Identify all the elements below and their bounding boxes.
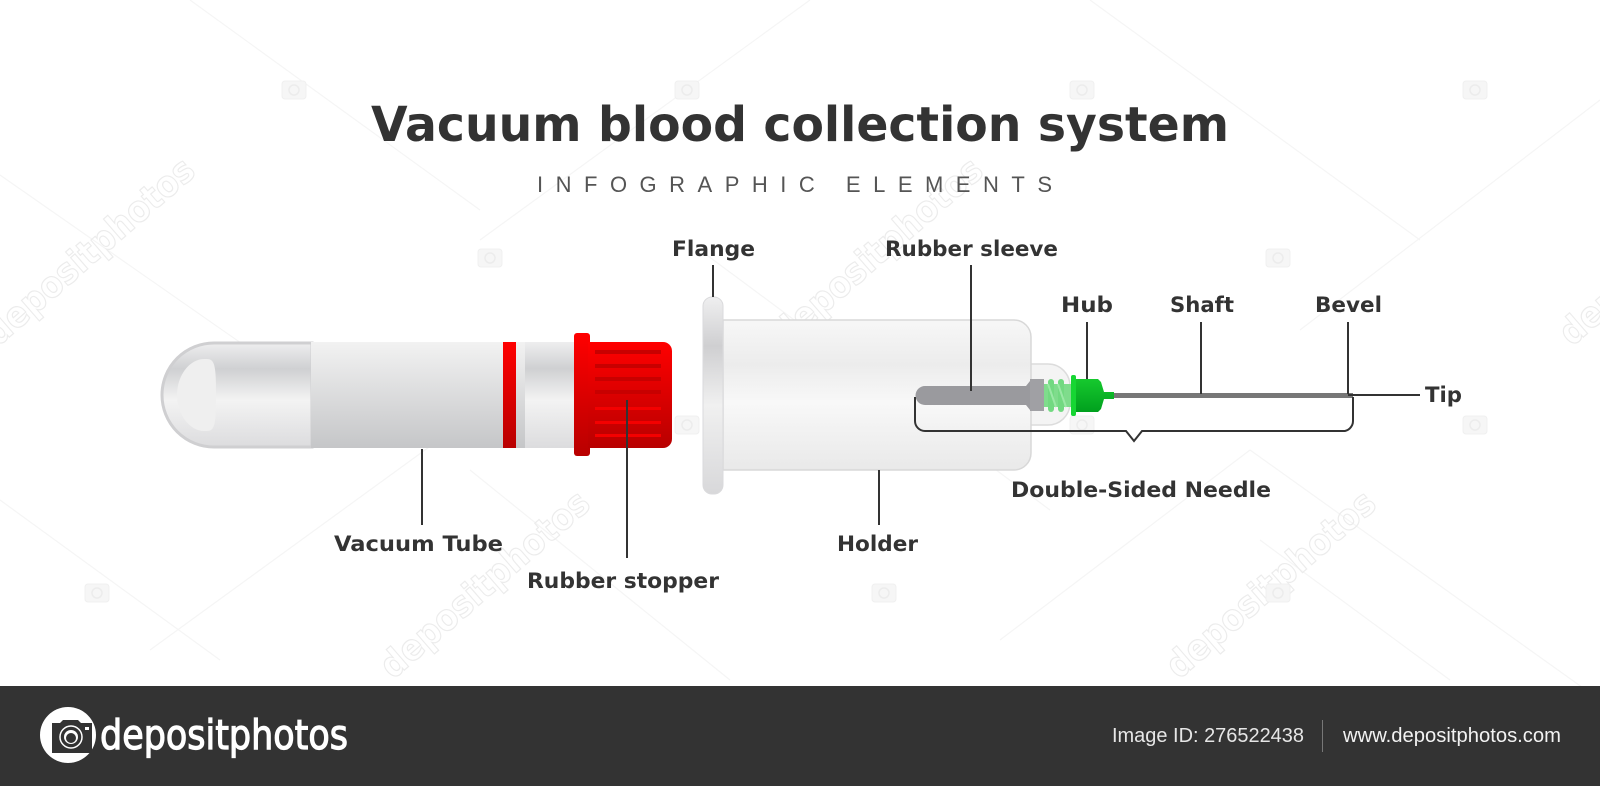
shaft <box>1112 393 1353 398</box>
threads <box>1044 379 1071 412</box>
rubber sleeve <box>916 381 1030 410</box>
title: Vacuum blood collection system <box>371 97 1229 153</box>
holder body <box>723 320 1031 470</box>
background watermark: depositphotos <box>765 150 991 354</box>
flange <box>703 297 723 494</box>
labels: Hub <box>1061 293 1113 317</box>
callout lines <box>422 265 1420 558</box>
labels: Tip <box>1425 383 1462 407</box>
footer bar <box>0 686 1600 786</box>
labels <box>334 237 1462 593</box>
double-sided needle <box>916 375 1353 416</box>
glass tube end <box>162 343 312 447</box>
subtitle: INFOGRAPHIC ELEMENTS <box>537 172 1052 197</box>
background watermark: depositphotos <box>1158 483 1384 687</box>
rubber stopper <box>574 333 672 456</box>
needle base <box>1030 379 1044 411</box>
website: www.depositphotos.com <box>1342 725 1561 747</box>
image id: Image ID: 276522438 <box>1112 725 1304 747</box>
background watermark: depositphotos <box>372 483 598 687</box>
red band <box>503 342 516 448</box>
vacuum tube <box>162 342 575 448</box>
hub <box>1076 379 1114 412</box>
bracket <box>915 397 1353 441</box>
footer divider <box>1322 720 1323 752</box>
holder nozzle <box>1030 364 1070 425</box>
tube inner highlight <box>177 359 216 431</box>
labels: Flange <box>672 237 755 261</box>
labels: Vacuum Tube <box>334 532 503 556</box>
labels: Bevel <box>1315 293 1382 317</box>
logo wordmark: depositphotos <box>100 711 348 759</box>
glass neck <box>525 342 575 448</box>
tube label <box>311 342 525 448</box>
labels: Double-Sided Needle <box>1011 478 1271 502</box>
labels: Rubber stopper <box>527 569 720 593</box>
labels: Holder <box>837 532 919 556</box>
labels: Rubber sleeve <box>885 237 1058 261</box>
labels: Shaft <box>1170 293 1234 317</box>
icon: camera logo <box>40 707 96 763</box>
